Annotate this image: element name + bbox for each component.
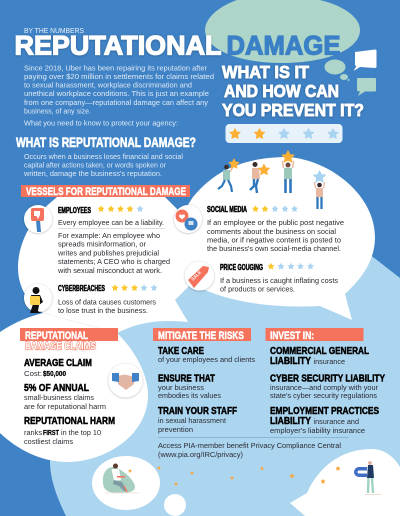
- divider and access note: Access PIA-member benefit Privacy Compliance Central: [158, 441, 341, 450]
- subtitle: WHAT IS IT: [222, 62, 309, 82]
- panel: invest in: insurance—and comply with your: [270, 383, 378, 392]
- panel: reputational damage claims: FIRST: [43, 428, 59, 437]
- decorative orange stars: [128, 466, 340, 485]
- card: employees: Every employee can be a liability.: [58, 218, 164, 227]
- illustration: people holding stars: [218, 151, 325, 209]
- rating: 2 of 5: [253, 206, 297, 212]
- card: social media: comments about the business on social: [207, 227, 336, 236]
- banner: vessels: VESSELS FOR REPUTATIONAL DAMAGE: [26, 186, 186, 198]
- intro text: unethical workplace conditions. This is just an example: [24, 89, 209, 98]
- card: social media: [174, 205, 344, 253]
- panel: mitigate the risks: TAKE CARE: [158, 345, 204, 357]
- subtitle: YOU PREVENT IT?: [222, 100, 364, 120]
- panel: invest in: LIABILITY: [270, 355, 311, 367]
- card: social media: If an employee or the public post negative: [207, 218, 344, 227]
- panel: reputational damage claims: REPUTATIONAL HARM: [24, 415, 115, 427]
- card: cyberbreaches: CYBERBREACHES: [58, 284, 105, 293]
- intro text: Since 2018, Uber has been repairing its reputation after: [24, 64, 207, 72]
- banner: claims: DAMAGE CLAIMS: [25, 340, 96, 352]
- panel: invest in: [266, 328, 385, 435]
- card: price gouging: PRICE GOUGING: [220, 263, 263, 272]
- panel: reputational damage claims: are for reputational harm: [24, 402, 106, 411]
- panel: reputational damage claims: 5% OF ANNUAL: [24, 382, 89, 394]
- panel: invest in: state's cyber security regulations: [270, 391, 377, 400]
- illustration: person on beanbag: [103, 464, 139, 493]
- icon: burglar: [24, 284, 52, 313]
- card: employees: [24, 205, 170, 275]
- panel: mitigate the risks: TRAIN YOUR STAFF: [158, 405, 237, 417]
- card: social media: the business's own social-media channel.: [207, 244, 341, 253]
- divider and access note: [158, 437, 349, 459]
- icon: handshake: [108, 364, 142, 398]
- card: employees: statements; A CEO who is charged: [58, 257, 170, 266]
- icon: price tag: SALE: [190, 270, 202, 282]
- icon: thumbs down sign: [24, 205, 52, 233]
- panel: invest in: insurance: [314, 357, 345, 366]
- card: cyberbreaches: to lose trust in the business.: [58, 306, 148, 315]
- panel: reputational damage claims: ranks: [24, 428, 42, 437]
- heading: what is reputational damage: WHAT IS REPUTATIONAL DAMAGE?: [16, 135, 196, 150]
- icon: white speech bubble: [354, 50, 376, 71]
- light blue background shape: [50, 242, 400, 516]
- card: price gouging: [185, 262, 338, 294]
- card: price gouging: If a business is caught inflating costs: [220, 276, 338, 285]
- bubble: bottom right: [290, 449, 400, 516]
- panel: reputational damage claims: small-business claims: [24, 393, 94, 402]
- panel: reputational damage claims: $50,000: [43, 369, 66, 378]
- card: cyberbreaches: Loss of data causes customers: [58, 298, 156, 306]
- eyebrow: BY THE NUMBERS: [24, 28, 84, 35]
- panel: reputational damage claims: AVERAGE CLAIM: [24, 357, 92, 369]
- panel: mitigate the risks: ENSURE THAT: [158, 372, 215, 384]
- card: cyberbreaches: [24, 284, 157, 315]
- panel: reputational damage claims: in the top 10: [61, 428, 101, 437]
- panel: reputational damage claims: costliest claims: [24, 437, 73, 446]
- panel: invest in: employer's liability insurance: [270, 426, 365, 435]
- intro text: [24, 64, 214, 128]
- claims white bubble: [0, 313, 148, 462]
- panel: mitigate the risks: your business: [158, 383, 204, 392]
- banner: invest: INVEST IN:: [270, 330, 314, 342]
- illustration: person with magnet: [354, 461, 381, 495]
- intro text: What you need to know to protect your agency:: [24, 118, 178, 128]
- card: social media: media, or if negative content is posted to: [207, 236, 341, 244]
- panel: reputational damage claims: Cost:: [24, 369, 42, 378]
- rating: 4 of 5: [98, 206, 143, 212]
- banner: vessels: [21, 185, 190, 198]
- icon: heart and thumbs: [174, 205, 202, 233]
- divider and access note: (www.pia.org/IRC/privacy): [158, 450, 243, 459]
- subtitle: AND HOW CAN: [224, 81, 339, 101]
- title: REPUTATIONAL: [14, 30, 222, 60]
- definition text: [23, 152, 183, 178]
- banner: mitigate: MITIGATE THE RISKS: [158, 330, 244, 342]
- icon: price tag: [185, 262, 214, 290]
- rating: 1 of 5: [268, 263, 313, 269]
- banner: claims: [20, 328, 118, 352]
- intro text: from one company—reputational damage can affect any: [24, 98, 208, 107]
- bubble: person on beanbag background: [92, 456, 160, 510]
- panel: mitigate the risks: in sexual harassment: [158, 416, 227, 425]
- intro text: to sexual harassment, workplace discrimination and: [24, 80, 192, 90]
- panel: mitigate the risks: embodies its values: [158, 391, 221, 400]
- panel: mitigate the risks: prevention: [158, 425, 193, 434]
- panel: invest in: insurance and: [314, 417, 359, 426]
- card: social media: SOCIAL MEDIA: [207, 205, 247, 214]
- panel: mitigate the risks: of your employees and clients: [158, 355, 255, 364]
- panel: mitigate the risks: [153, 328, 255, 434]
- card: price gouging: of products or services.: [220, 284, 295, 294]
- card: employees: with sexual misconduct at work.: [57, 266, 162, 275]
- mint title bubble: [205, 0, 360, 81]
- title: damage: DAMAGE: [226, 30, 340, 60]
- intro text: paying over $20 million in settlements for claims related: [24, 72, 214, 81]
- card: employees: writes and publishes prejudicial: [57, 248, 159, 258]
- panel: invest in: COMMERCIAL GENERAL: [270, 345, 369, 357]
- panel: invest in: LIABILITY: [270, 415, 311, 427]
- card: employees: spreads misinformation, or: [58, 240, 146, 248]
- panel: reputational damage claims: [20, 328, 142, 446]
- rating: 3 of 5: [112, 285, 157, 291]
- card: employees: EMPLOYEES: [58, 206, 91, 215]
- star rating bar: [226, 124, 342, 143]
- icon: mint speech bubble: [357, 78, 376, 96]
- card: employees: For example: An employee who: [58, 231, 160, 240]
- intro text: business, of any size.: [24, 106, 91, 116]
- subtitle: [222, 62, 364, 120]
- definition text: capital after actions taken, or words spoken or: [24, 160, 166, 170]
- small white circle: [164, 494, 186, 516]
- definition text: written, damage the business's reputation.: [23, 169, 162, 178]
- main white speech bubble: [18, 157, 375, 333]
- definition text: Occurs when a business loses financial and social: [24, 152, 183, 161]
- banner: claims: REPUTATIONAL: [25, 330, 88, 342]
